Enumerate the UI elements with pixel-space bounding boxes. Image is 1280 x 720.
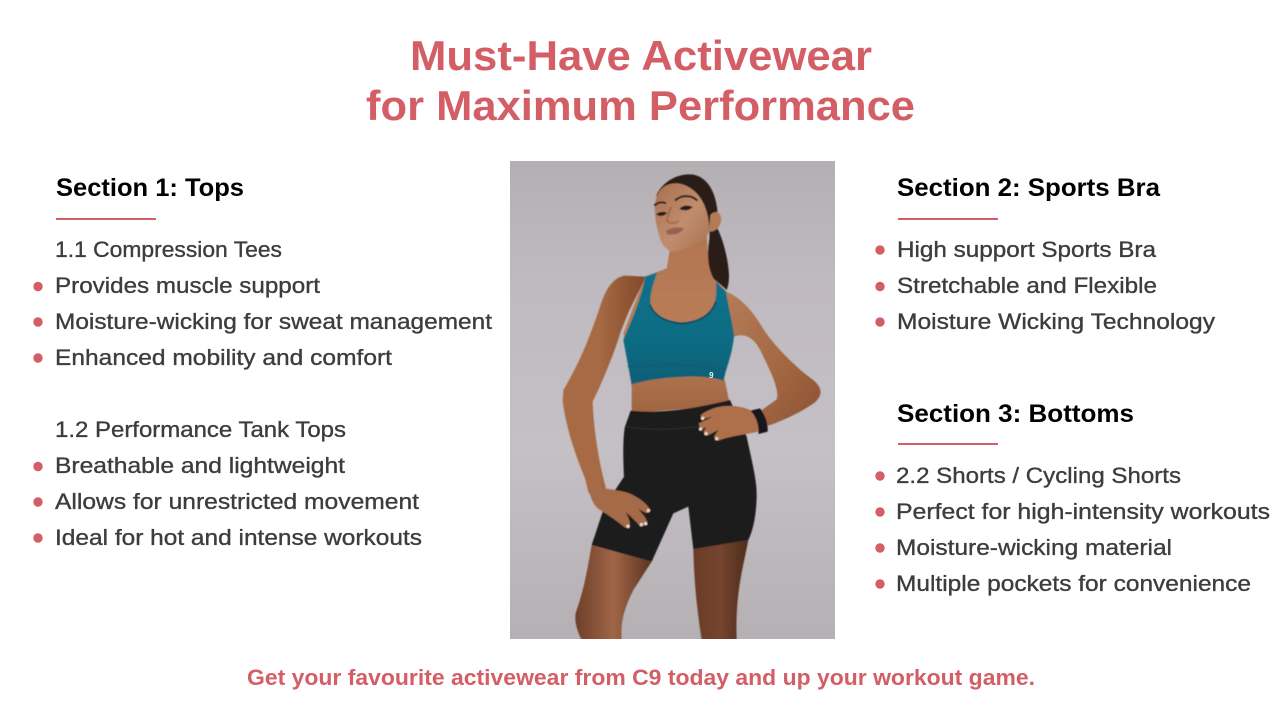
title xyxy=(366,32,915,129)
list: tank tops benefits xyxy=(33,453,422,550)
shorts xyxy=(592,400,757,562)
arm: viewer's right xyxy=(726,292,821,426)
list: sports bra benefits: High support Sports Bra xyxy=(897,237,1157,262)
list: tank tops benefits: Ideal for hot and intense workouts xyxy=(55,525,422,550)
panel: section 1 tops xyxy=(33,174,492,550)
list: shorts benefits: Multiple pockets for convenience xyxy=(896,571,1251,596)
eyebrows xyxy=(654,196,697,206)
list: sports bra benefits: Stretchable and Flexible xyxy=(897,273,1157,298)
face xyxy=(655,183,709,252)
logo on bra: 9 xyxy=(709,371,714,380)
eyes xyxy=(656,212,667,216)
list: sports bra benefits xyxy=(875,237,1215,334)
hand on left thigh xyxy=(588,485,651,528)
panel: section 2 sports bra xyxy=(875,174,1215,334)
subheading: performance tank tops: 1.2 Performance Tank Tops xyxy=(55,417,346,442)
heading: section 2: Section 2: Sports Bra xyxy=(897,174,1161,202)
list: compression tees benefits: Provides muscle support xyxy=(55,273,320,298)
photo: woman in teal sports bra and black shorts xyxy=(510,161,835,640)
waistband line xyxy=(626,426,699,430)
neck and chest xyxy=(623,235,734,413)
arm: viewer's left xyxy=(563,276,645,493)
list: tank tops benefits: Allows for unrestricted movement xyxy=(55,489,419,514)
list: shorts benefits: Moisture-wicking material xyxy=(896,535,1172,560)
list: shorts benefits xyxy=(875,463,1270,596)
finger nails xyxy=(626,417,718,528)
right hand on waist xyxy=(699,406,760,441)
sports bra xyxy=(623,272,734,384)
title: Must-Have Activewear xyxy=(410,32,872,79)
title: for Maximum Performance xyxy=(366,82,915,129)
lips xyxy=(666,227,684,235)
heading: section 1: Section 1: Tops xyxy=(56,174,244,202)
ear xyxy=(709,212,721,232)
list: tank tops benefits: Breathable and lightweight xyxy=(55,453,345,478)
subheading: compression tees: 1.1 Compression Tees xyxy=(55,237,282,262)
ponytail and hair xyxy=(656,174,729,290)
footer call to action: Get your favourite activewear from C9 today and up your workout game. xyxy=(247,665,1035,690)
list: compression tees benefits: Moisture-wicking for sweat management xyxy=(55,309,492,334)
list: shorts benefits: Perfect for high-intensity workouts xyxy=(896,499,1270,524)
list: compression tees benefits xyxy=(33,273,492,370)
nose xyxy=(667,207,678,223)
heading: section 3: Section 3: Bottoms xyxy=(897,400,1134,428)
panel: section 3 bottoms xyxy=(875,400,1270,596)
list: shorts benefits: 2.2 Shorts / Cycling Shorts xyxy=(896,463,1181,488)
list: sports bra benefits: Moisture Wicking Technology xyxy=(897,309,1215,334)
list: compression tees benefits: Enhanced mobility and comfort xyxy=(55,345,392,370)
watch xyxy=(751,408,768,434)
thighs xyxy=(575,545,652,640)
